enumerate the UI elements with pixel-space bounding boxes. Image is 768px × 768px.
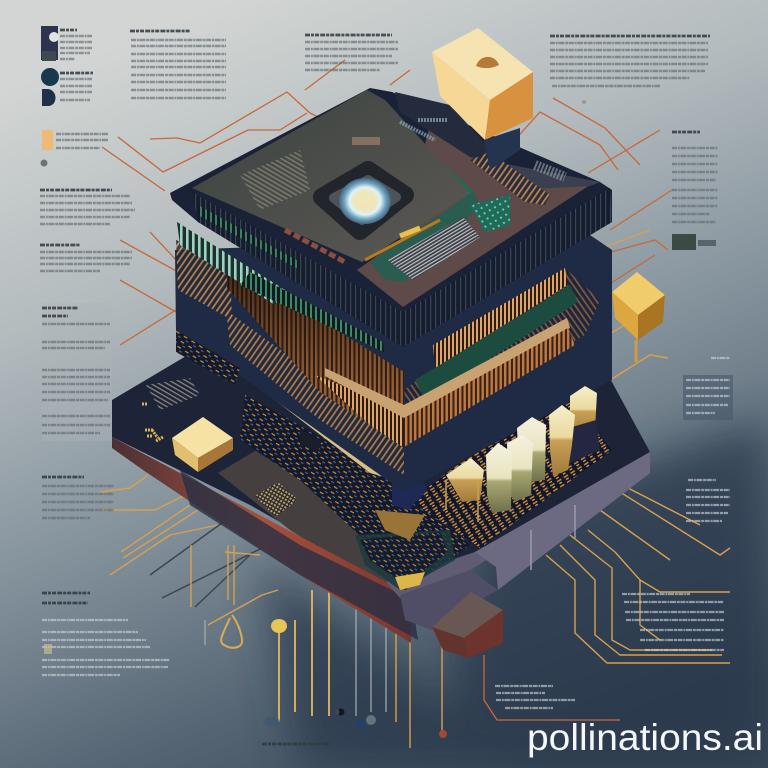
dots panel left xyxy=(240,150,310,210)
text block: top centre xyxy=(305,35,398,70)
cream box top right xyxy=(432,28,533,170)
CPU core socket xyxy=(322,170,405,231)
base brown deck xyxy=(218,445,470,590)
text block: bottom caption xyxy=(262,743,330,745)
text panel: right dark xyxy=(683,375,733,420)
capacitor columns xyxy=(446,386,600,522)
icon: orange tile xyxy=(42,130,53,150)
icon: small tile xyxy=(42,51,56,61)
brown mark on box xyxy=(476,57,499,68)
fan fins: right xyxy=(404,270,600,430)
light seams xyxy=(531,505,575,570)
green strip on left face xyxy=(198,205,300,270)
text block: right tall xyxy=(672,132,718,250)
icon: notched tile xyxy=(41,26,58,60)
base left front strip xyxy=(112,437,411,643)
green circuit patch xyxy=(470,195,510,232)
mesh chip xyxy=(255,482,298,517)
small gold marks xyxy=(142,404,163,441)
base purple lower side xyxy=(400,570,498,630)
brown box xyxy=(432,592,503,658)
circuit accents xyxy=(285,230,345,262)
text block: top left article xyxy=(130,31,226,98)
teal spikes: left xyxy=(177,222,285,305)
dark cast shadow xyxy=(260,420,768,768)
left side face xyxy=(192,192,403,347)
text block: left second xyxy=(40,190,135,224)
box stem xyxy=(484,128,520,170)
icon: small gauge xyxy=(40,160,48,166)
circuit clutter on base xyxy=(142,362,612,590)
outer navy shell xyxy=(170,88,612,347)
circuit stack: left xyxy=(176,330,240,385)
text block: top right xyxy=(550,36,710,104)
connector lines: lower left xyxy=(100,475,278,645)
orange vents xyxy=(470,152,550,205)
orange fins: right upper xyxy=(433,268,568,368)
icon: loop connector xyxy=(221,615,242,648)
text block: right bottom xyxy=(622,594,724,650)
base navy front shadow xyxy=(180,470,418,640)
fan fins: lower left xyxy=(226,310,404,475)
navy middle slab xyxy=(175,235,612,492)
base purple right side xyxy=(475,452,650,590)
orange fins: lower left front xyxy=(315,375,404,448)
base platform xyxy=(112,330,652,658)
base purple upper ledge xyxy=(386,452,652,610)
top face gray xyxy=(192,90,470,262)
glowing core xyxy=(339,178,391,224)
grill xyxy=(388,217,480,280)
icon: yellow node xyxy=(271,619,287,633)
orange fins: right lower xyxy=(404,328,575,447)
top face right brown xyxy=(357,125,593,307)
icons: terminal dots xyxy=(264,708,447,738)
connector lines: lower right xyxy=(484,488,730,720)
navy and gold blob xyxy=(392,470,428,510)
right side face xyxy=(403,188,612,347)
icon: navy half disc xyxy=(42,89,56,106)
orange fins: left face xyxy=(227,262,404,447)
text block: right lower xyxy=(686,480,730,521)
text block: left callout with icon xyxy=(40,130,108,166)
top face green edge xyxy=(362,100,477,212)
tan label xyxy=(352,137,380,145)
text block: left lower xyxy=(42,477,114,518)
cream box left xyxy=(172,417,233,472)
text panel: left tall xyxy=(42,303,112,441)
blue rear panel xyxy=(395,92,500,160)
green fin band: left xyxy=(240,272,384,352)
connector lines: upper left xyxy=(102,60,410,345)
text block: left third xyxy=(40,245,132,271)
green circuit tray: right xyxy=(415,285,578,400)
text block: top-left icon list xyxy=(41,26,93,106)
connector lines: upper right xyxy=(503,98,672,380)
connector lines: bottom verticals xyxy=(279,540,442,748)
watermark: pollinations.ai xyxy=(527,717,763,758)
tan lip xyxy=(325,318,570,418)
text block: bottom left xyxy=(42,593,170,675)
fin shading: left face xyxy=(227,262,404,447)
cream rail xyxy=(232,362,402,480)
icon: teal disc xyxy=(41,68,59,86)
text label: small right xyxy=(711,357,730,359)
base top face xyxy=(112,330,650,582)
processor top block xyxy=(170,88,612,347)
text block: bottom centre xyxy=(495,686,575,708)
fan fins: left xyxy=(176,240,232,320)
gold box right xyxy=(612,272,665,362)
